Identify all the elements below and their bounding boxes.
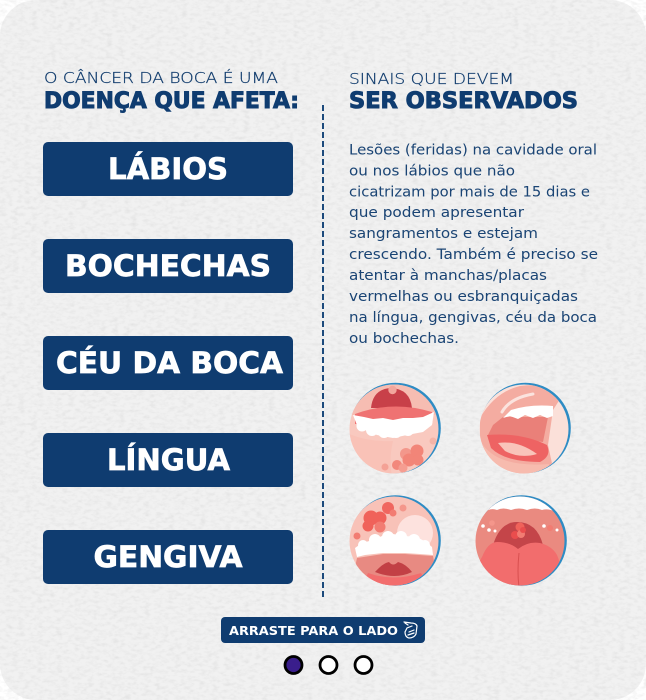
button: lábios: LÁBIOS <box>108 152 228 186</box>
text block: signs description: na língua, gengivas, céu da boca <box>349 310 597 326</box>
illustration: lower lip lesions <box>350 382 441 474</box>
heading: left column: DOENÇA QUE AFETA: <box>44 89 299 114</box>
button: bochechas: BOCHECHAS <box>65 249 271 283</box>
button: céu da boca <box>43 336 293 390</box>
button: gengiva: GENGIVA <box>94 540 243 574</box>
button: arraste para o lado <box>221 617 425 643</box>
heading: left column: O CÂNCER DA BOCA É UMA <box>44 68 278 87</box>
text block: signs description: atentar à manchas/placas <box>349 268 547 284</box>
button: arraste para o lado: ARRASTE PARA O LADO <box>229 623 398 638</box>
heading: right column <box>349 70 578 114</box>
text block: signs description: Lesões (feridas) na cavidade oral <box>349 142 597 158</box>
illustration: throat lesions <box>476 495 567 586</box>
text block: signs description <box>349 142 598 347</box>
icon: swipe hand <box>404 622 417 638</box>
button: bochechas <box>43 239 293 293</box>
text block: signs description: vermelhas ou esbranquiçadas <box>349 289 578 305</box>
heading: left column <box>44 68 299 114</box>
button: céu da boca: CÉU DA BOCA <box>56 346 284 380</box>
button: língua <box>43 433 293 487</box>
illustration: palate lesions <box>350 495 441 586</box>
text block: signs description: ou nos lábios que não <box>349 164 515 180</box>
button: lábios <box>43 142 293 196</box>
button: gengiva <box>43 530 293 584</box>
text block: signs description: crescendo. Também é preciso se <box>349 247 598 263</box>
heading: right column: SER OBSERVADOS <box>349 89 578 114</box>
button: língua: LÍNGUA <box>107 443 231 477</box>
text block: signs description: que podem apresentar <box>349 205 524 221</box>
text block: signs description: sangramentos e estejam <box>349 226 538 242</box>
text block: signs description: ou bochechas. <box>349 331 459 347</box>
text block: signs description: cicatrizam por mais de 15 dias e <box>349 184 590 200</box>
heading: right column: SINAIS QUE DEVEM <box>349 70 514 88</box>
illustration: inner cheek and tongue <box>480 382 571 474</box>
pagination dots <box>285 656 372 674</box>
